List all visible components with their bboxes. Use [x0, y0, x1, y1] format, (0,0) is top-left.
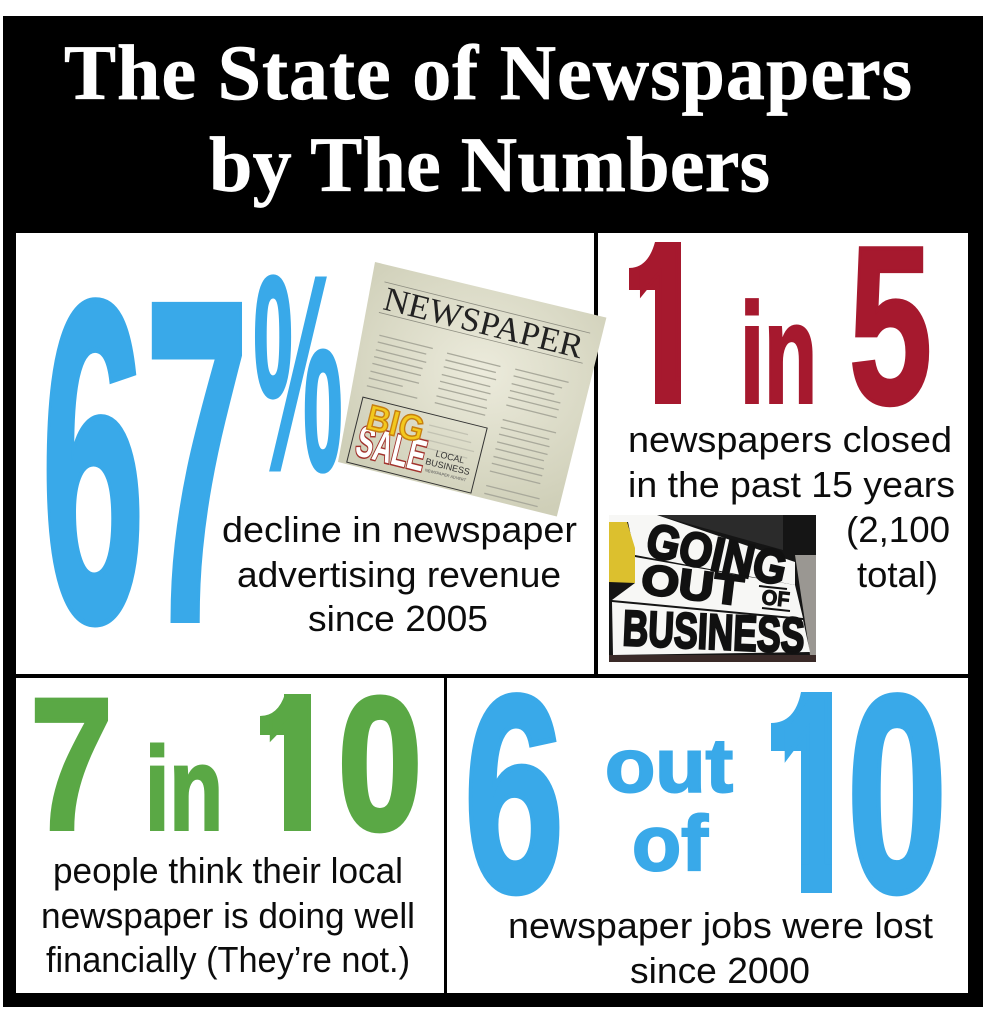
big number: 1 in 5: 5 — [849, 199, 932, 451]
text: jobs caption: newspaper jobs were lost — [508, 905, 933, 946]
ad box: NEWSPAPER ADVERT — [424, 467, 467, 483]
text: closed caption: in the past 15 years — [628, 464, 955, 505]
big number: 6 out of 10: 6 — [464, 639, 564, 951]
photo: going out of business sign: GOING — [642, 514, 792, 596]
text: closed caption: newspapers closed — [628, 419, 952, 460]
text: decline caption: advertising revenue — [237, 554, 561, 595]
big number: 6 out of 10: of — [632, 799, 709, 887]
photo: going out of business sign: OF — [760, 586, 791, 612]
title: by The Numbers — [209, 121, 770, 208]
text: people caption: newspaper is doing well — [41, 895, 415, 936]
ad box: LOCAL — [435, 449, 466, 465]
big number: 1 in 5 — [629, 242, 930, 408]
text: decline caption: decline in newspaper — [222, 509, 577, 550]
panel: 6 out of 10 — [447, 678, 968, 993]
big number: 7 in 10: 7 — [30, 659, 113, 869]
photo: going out of business sign: OUT — [639, 555, 746, 614]
icon: tilted newspaper — [326, 260, 606, 517]
big number: 1 in 5: in — [740, 274, 817, 434]
text: decline caption: since 2005 — [308, 598, 488, 639]
text: closed caption: (2,100 — [846, 509, 950, 550]
big number: 6 out of 10: 1 — [777, 634, 851, 950]
panel: 1 in 5 closed — [598, 195, 968, 674]
text: closed caption: total) — [857, 554, 938, 595]
text: jobs caption: since 2000 — [630, 950, 810, 991]
ad box: BIG — [362, 396, 429, 450]
big number: 7 in 10 — [34, 694, 418, 834]
text: jobs caption — [508, 905, 933, 991]
big number: 7 in 10: in — [145, 724, 223, 856]
photo: going out of business sign — [609, 514, 816, 664]
text: closed caption — [628, 419, 955, 595]
big number: 1 in 5: 1 — [633, 195, 698, 451]
ad box: SALE — [351, 417, 431, 481]
big number: 7 in 10: 0 — [338, 659, 422, 870]
big number: 6 out of 10: out — [605, 724, 733, 809]
panel: 67% decline: 67 — [41, 206, 249, 718]
text: % — [253, 218, 343, 530]
text: people caption: financially (They’re not.) — [46, 939, 410, 980]
big number: 7 in 10: 1 — [263, 654, 328, 870]
big number: 6 out of 10 — [468, 692, 942, 896]
ad box: BUSINESS — [424, 456, 471, 477]
panel: 7 in 10 — [16, 654, 444, 993]
text: people caption — [41, 850, 415, 980]
ad box — [347, 394, 488, 494]
title: The State of Newspapers — [64, 29, 912, 116]
photo: going out of business sign: BUSINESS — [622, 600, 806, 664]
icon: tilted newspaper: NEWSPAPER — [380, 281, 587, 366]
text: decline caption — [222, 509, 577, 639]
title — [64, 29, 912, 208]
text: people caption: people think their local — [53, 850, 403, 891]
